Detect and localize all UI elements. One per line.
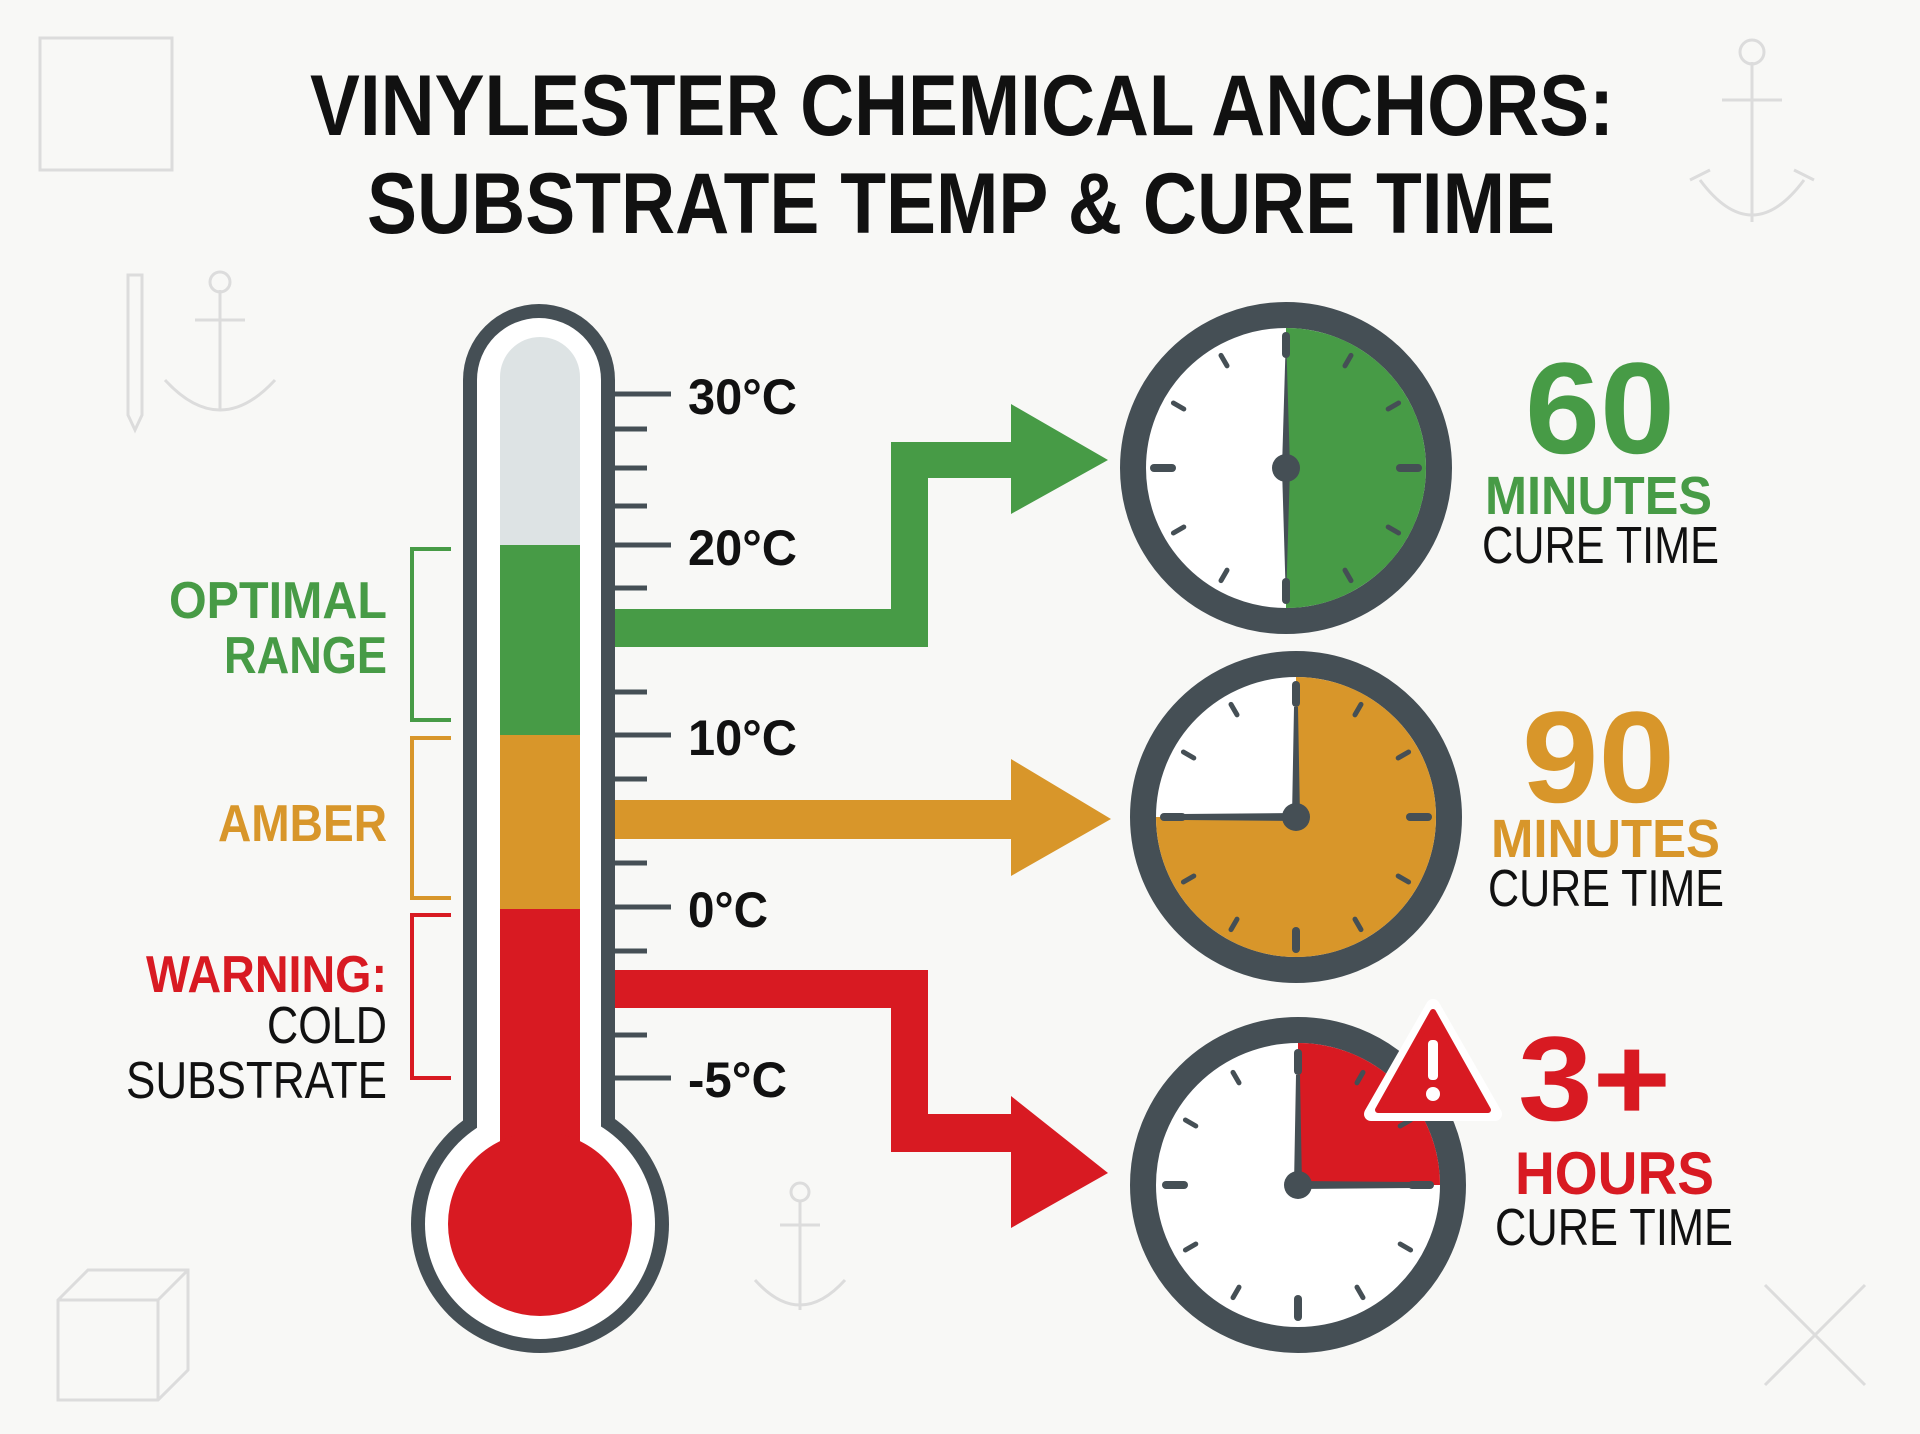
cure time text: 90 minutes: MINUTES	[1491, 809, 1720, 869]
cure time text: 3+ hours	[1495, 1012, 1733, 1257]
arrow: green	[615, 404, 1108, 647]
temperature labels: 30°C	[688, 369, 797, 425]
thermometer	[411, 304, 669, 1353]
cure time text: 60 minutes	[1482, 335, 1719, 575]
cure time text: 3+ hours: CURE TIME	[1495, 1199, 1733, 1257]
cure time text: 90 minutes: 90	[1522, 684, 1675, 830]
range labels: OPTIMAL	[169, 572, 387, 630]
range labels: COLD	[267, 997, 387, 1055]
temperature labels	[688, 369, 797, 1108]
cure time text: 90 minutes: CURE TIME	[1488, 860, 1724, 918]
title: VINYLESTER CHEMICAL ANCHORS:	[310, 58, 1614, 154]
cure time text: 60 minutes: CURE TIME	[1482, 517, 1719, 575]
temperature labels: -5°C	[688, 1052, 787, 1108]
temperature scale ticks	[615, 394, 671, 1078]
arrow: amber	[615, 759, 1111, 876]
range brackets	[412, 549, 451, 1078]
arrow: red	[615, 970, 1108, 1228]
temperature labels: 10°C	[688, 710, 797, 766]
clock 3	[1143, 1030, 1453, 1340]
cure time text: 3+ hours: HOURS	[1515, 1140, 1714, 1207]
temperature labels: 0°C	[688, 882, 768, 938]
range labels: SUBSTRATE	[126, 1052, 387, 1110]
range labels	[126, 572, 387, 1110]
range labels: RANGE	[224, 627, 387, 685]
clock 1	[1133, 315, 1439, 621]
clock 2	[1143, 664, 1449, 970]
cure time text: 3+ hours: 3+	[1518, 1012, 1671, 1146]
range labels: AMBER	[218, 795, 387, 853]
cure time text: 60 minutes: MINUTES	[1485, 466, 1712, 526]
range labels: WARNING:	[146, 946, 387, 1004]
title: SUBSTRATE TEMP & CURE TIME	[367, 156, 1555, 252]
title	[310, 58, 1614, 252]
temperature labels: 20°C	[688, 520, 797, 576]
cure time text: 90 minutes	[1488, 684, 1724, 918]
icon: warning triangle	[1371, 1006, 1495, 1114]
cure time text: 60 minutes: 60	[1525, 335, 1675, 481]
